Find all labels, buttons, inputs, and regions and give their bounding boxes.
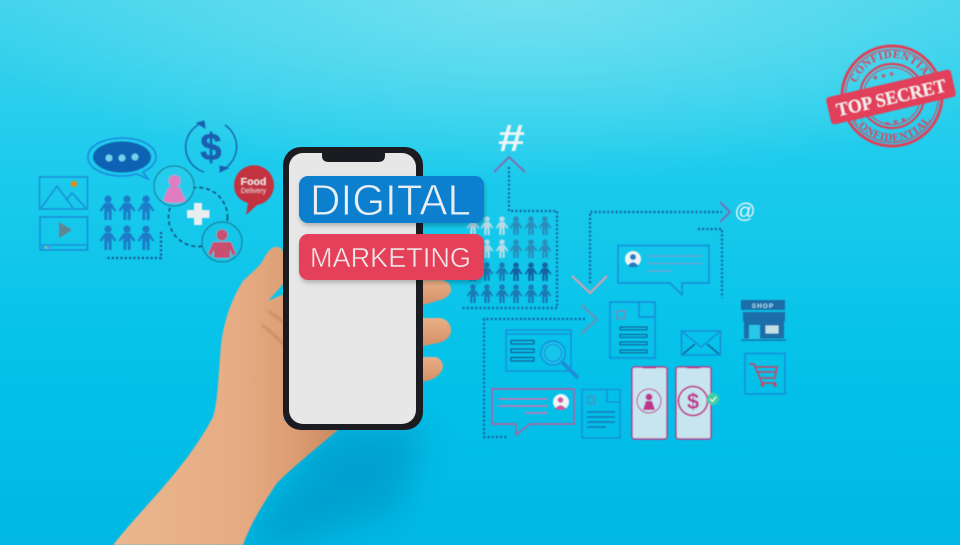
icon: plus <box>187 203 210 225</box>
icon: red person <box>202 222 242 262</box>
shop icon <box>741 300 786 341</box>
chevron right <box>581 305 597 334</box>
phone notch <box>322 153 385 162</box>
icon: food delivery badge <box>234 165 274 215</box>
audience people grid <box>467 216 551 303</box>
icon: video player <box>40 217 88 250</box>
top secret stamp: CONFIDENTIAL <box>854 118 931 142</box>
at sign: @ <box>734 200 756 223</box>
document <box>610 302 655 358</box>
shop icon: SHOP <box>752 303 774 310</box>
icon: food delivery badge: Delivery <box>241 188 267 195</box>
dotted connector lower <box>484 319 585 437</box>
stamp band: TOP SECRET <box>834 76 949 121</box>
phone with person <box>632 367 667 439</box>
document two <box>582 390 620 438</box>
phone with dollar: $ <box>687 389 699 414</box>
check badge <box>707 393 719 405</box>
dashed connector circle <box>168 188 228 246</box>
envelope <box>682 331 720 355</box>
phone screen <box>289 153 416 424</box>
stamp ring text: CONFIDENTIAL <box>850 50 932 82</box>
right icon cluster <box>462 118 786 439</box>
dotted connector to audience <box>462 167 557 308</box>
label: MARKETING: MARKETING <box>310 242 471 273</box>
shopping cart icon <box>745 354 785 394</box>
stamp stars: ★ ★ ★ <box>872 70 896 83</box>
dotted connector right <box>698 229 722 298</box>
label: MARKETING <box>299 234 484 280</box>
message bubble <box>618 246 709 295</box>
smartphone <box>283 147 423 430</box>
chevron down <box>572 276 607 293</box>
thumb crease <box>262 311 284 345</box>
stamp stars: ★ ★ ★ <box>884 116 908 129</box>
icon: speech bubble <box>88 138 156 179</box>
stamp stars <box>872 70 908 129</box>
chevron right to at sign <box>720 202 730 222</box>
group of people <box>100 196 154 250</box>
hand holding phone <box>113 247 451 545</box>
icon: food delivery badge: Food <box>241 176 266 188</box>
icon: pink person <box>154 166 194 206</box>
hashtag: # <box>498 118 525 160</box>
left icon cluster <box>40 121 274 262</box>
label: DIGITAL: DIGITAL <box>310 176 471 225</box>
dotted connector <box>105 232 161 258</box>
icon: image <box>40 177 88 209</box>
chevron up <box>494 157 525 172</box>
drop shadow of hand and phone <box>240 425 425 545</box>
pink chat bubble <box>492 389 574 435</box>
palm, thumb and arm <box>113 247 338 545</box>
top secret stamp <box>826 44 956 148</box>
search window <box>506 330 577 377</box>
icon: dollar cycle: $ <box>200 127 222 169</box>
icon: dollar cycle <box>186 121 237 172</box>
right fingers <box>415 280 451 382</box>
dotted connector to at sign <box>590 212 722 283</box>
phone with dollar <box>676 367 719 439</box>
